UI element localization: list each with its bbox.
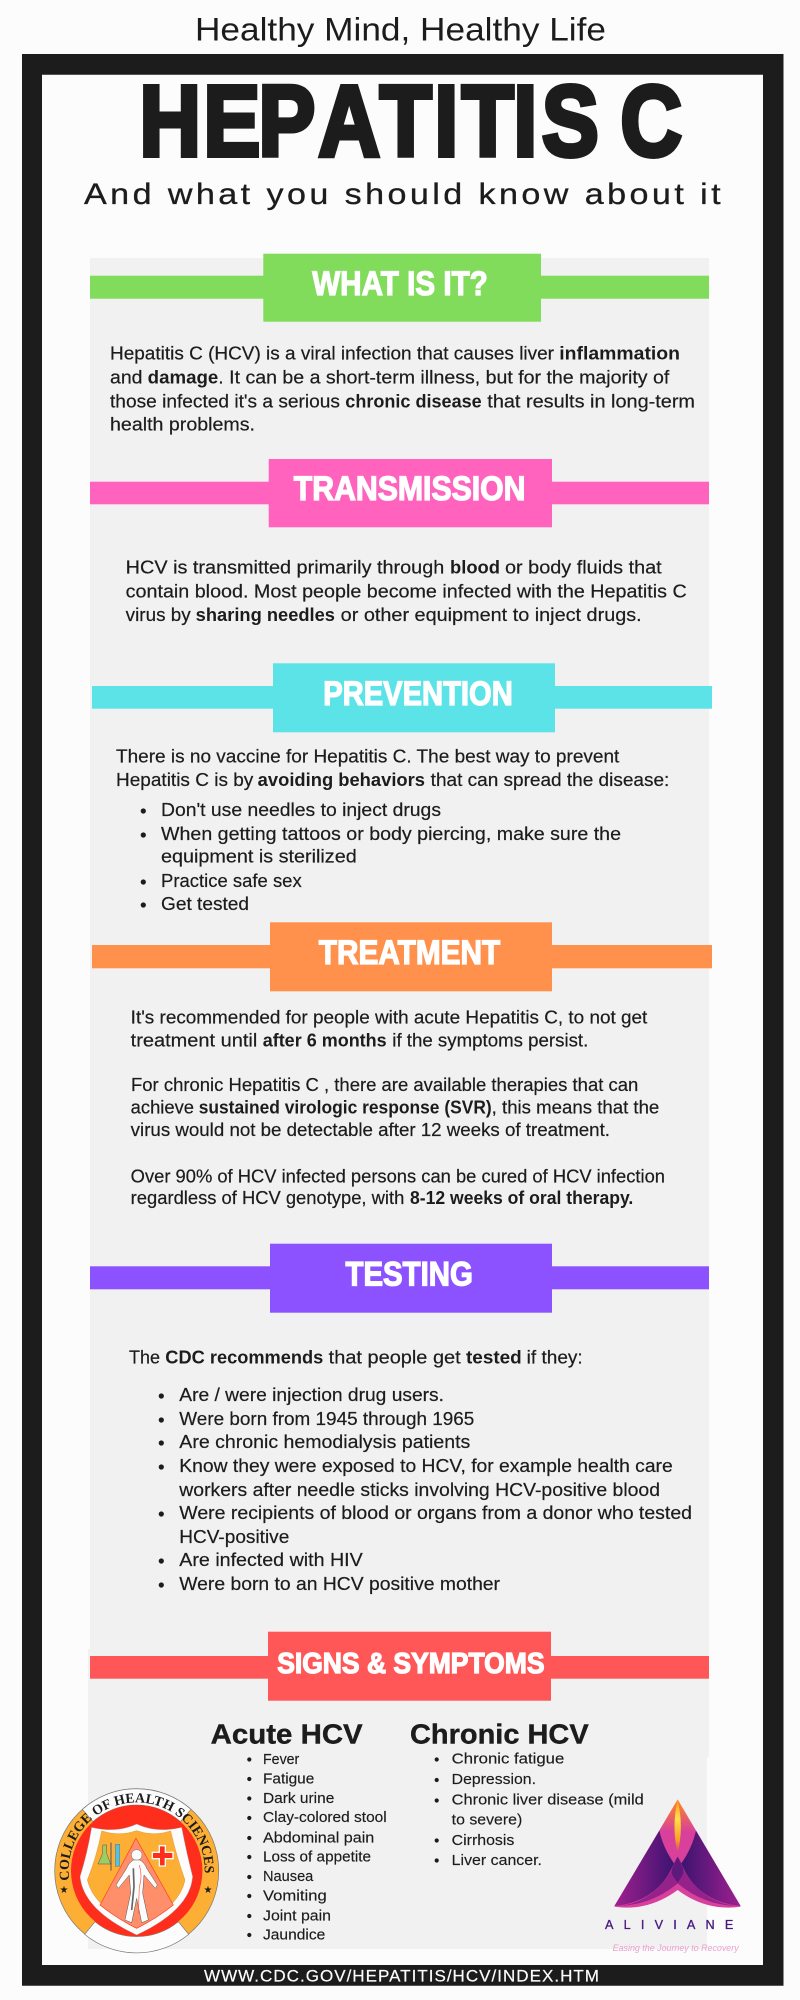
bullet list: testing: Were born from 1945 through 1965 bbox=[179, 1409, 474, 1429]
text block: prevention intro: There is no vaccine for Hepatitis C. The best way to prevent bbox=[116, 746, 619, 766]
bullet list: acute HCV symptoms: Loss of appetite bbox=[263, 1849, 371, 1865]
text block: testing intro: The bbox=[129, 1347, 160, 1367]
banner: signs and symptoms bbox=[90, 1632, 709, 1701]
text block: transmission: virus by bbox=[126, 605, 191, 625]
human figure bbox=[131, 1850, 142, 1860]
icon: College of Health Sciences seal: ★ bbox=[60, 1885, 69, 1896]
bullet list: acute HCV symptoms: Nausea bbox=[263, 1869, 314, 1885]
text block: what is it: and bbox=[110, 367, 142, 387]
banner: prevention bbox=[92, 663, 712, 732]
banner: testing bbox=[90, 1244, 709, 1313]
subtitle: And what you should know about it bbox=[84, 178, 724, 211]
icon: College of Health Sciences seal: COLLEGE OF HEALTH SCIENCES bbox=[60, 1793, 214, 1880]
footer URL: WWW.CDC.GOV/HEPATITIS/HCV/INDEX.HTM bbox=[204, 1967, 600, 1986]
text block: what is it: inflammation bbox=[559, 343, 680, 363]
bullet list: testing: workers after needle sticks involving HCV-positive blood bbox=[178, 1480, 660, 1500]
text block: treatment: achieve bbox=[131, 1097, 194, 1117]
text block: transmission bbox=[126, 557, 687, 625]
bullet list: prevention: When getting tattoos or body piercing, make sure the bbox=[161, 824, 621, 844]
panel: transmission bbox=[90, 459, 709, 625]
bullet list: testing: Were born to an HCV positive mother bbox=[179, 1574, 500, 1594]
banner: transmission bbox=[90, 459, 709, 527]
banner: signs and symptoms: SIGNS & SYMPTOMS bbox=[277, 1648, 544, 1680]
text block: testing intro: that people get bbox=[329, 1347, 461, 1367]
logo tagline: Easing the Journey to Recovery bbox=[613, 1943, 740, 1953]
bullet list: acute HCV symptoms: Fever bbox=[263, 1752, 299, 1768]
panel: light grey content background bbox=[88, 258, 709, 1949]
bullet list: acute HCV symptoms: Dark urine bbox=[263, 1791, 334, 1807]
text block: treatment: regardless of HCV genotype, with bbox=[131, 1188, 404, 1208]
text block: transmission: contain blood. Most people become infected with the Hepatitis C bbox=[126, 581, 687, 601]
bullet list: chronic HCV symptoms: Liver cancer. bbox=[452, 1853, 542, 1869]
red cross bbox=[152, 1846, 173, 1866]
text block: transmission: HCV is transmitted primarily through bbox=[126, 557, 444, 577]
text block: testing intro: CDC recommends bbox=[165, 1347, 323, 1367]
banner: what is it: WHAT IS IT? bbox=[312, 265, 488, 303]
text block: testing intro bbox=[129, 1347, 583, 1367]
bullet list: prevention bbox=[141, 800, 621, 914]
icon: College of Health Sciences seal: ★ bbox=[204, 1885, 213, 1896]
bullet list: testing: Are / were injection drug users. bbox=[179, 1385, 444, 1405]
text block: what is it: those infected it's a serious bbox=[110, 391, 340, 411]
panel: signs and symptoms bbox=[90, 1632, 709, 1943]
bullet list: prevention: Don't use needles to inject drugs bbox=[161, 800, 441, 820]
panel: prevention bbox=[92, 663, 712, 914]
banner: testing: TESTING bbox=[346, 1256, 473, 1294]
text block: treatment: , this means that the bbox=[492, 1097, 659, 1117]
heading: acute HCV: Acute HCV bbox=[211, 1718, 363, 1749]
icon: Aliviane logo bbox=[605, 1799, 747, 1953]
bullet list: acute HCV symptoms: Clay-colored stool bbox=[263, 1810, 387, 1826]
text block: treatment: after 6 months bbox=[263, 1030, 387, 1050]
bullet list: acute HCV symptoms: Joint pain bbox=[263, 1908, 331, 1924]
banner: prevention: PREVENTION bbox=[323, 675, 513, 713]
text block: what is it: Hepatitis C (HCV) is a viral infection that causes liver bbox=[110, 343, 554, 363]
text block: what is it bbox=[110, 343, 695, 434]
text block: prevention intro: avoiding behaviors bbox=[258, 770, 425, 790]
text block: prevention intro bbox=[116, 746, 669, 790]
text block: transmission: or other equipment to inject drugs. bbox=[341, 605, 642, 625]
panel: what is it bbox=[90, 254, 709, 434]
bullet list: chronic HCV symptoms: Depression. bbox=[452, 1772, 536, 1788]
text block: transmission: or body fluids that bbox=[505, 557, 662, 577]
icon: College of Health Sciences seal bbox=[54, 1788, 220, 1954]
bullet list: chronic HCV symptoms bbox=[435, 1752, 644, 1869]
text block: treatment: virus would not be detectable after 12 weeks of treatment. bbox=[131, 1120, 610, 1140]
banner: what is it bbox=[90, 254, 709, 322]
text block: treatment: For chronic Hepatitis C , there are available therapies that can bbox=[131, 1075, 638, 1095]
bullet list: acute HCV symptoms bbox=[247, 1752, 387, 1943]
bullet list: testing: Are chronic hemodialysis patients bbox=[179, 1432, 470, 1452]
banner: treatment bbox=[92, 922, 712, 991]
top tagline: Healthy Mind, Healthy Life bbox=[195, 12, 606, 48]
bullet list: chronic HCV symptoms: Cirrhosis bbox=[452, 1833, 514, 1849]
text block: treatment bbox=[131, 1007, 665, 1208]
bullet list: acute HCV symptoms: Vomiting bbox=[263, 1888, 327, 1904]
text block: prevention intro: Hepatitis C is by bbox=[116, 770, 253, 790]
text block: transmission: sharing needles bbox=[196, 605, 335, 625]
text block: treatment: sustained virologic response (SVR) bbox=[199, 1097, 492, 1117]
bullet list: prevention: Practice safe sex bbox=[161, 871, 302, 891]
bullet list: acute HCV symptoms: Abdominal pain bbox=[263, 1830, 374, 1846]
bullet list: acute HCV symptoms: Jaundice bbox=[263, 1927, 325, 1943]
text block: what is it: damage bbox=[148, 367, 218, 387]
bullet list: prevention: Get tested bbox=[161, 894, 249, 914]
bullet list: testing: HCV-positive bbox=[179, 1527, 289, 1547]
shield bbox=[80, 1824, 193, 1935]
text block: testing intro: if they: bbox=[527, 1347, 583, 1367]
heading: chronic HCV: Chronic HCV bbox=[410, 1718, 589, 1749]
text block: what is it: that results in long-term bbox=[487, 391, 695, 411]
bullet list: chronic HCV symptoms: Chronic fatigue bbox=[452, 1752, 564, 1768]
banner: treatment: TREATMENT bbox=[319, 934, 500, 972]
text block: prevention intro: that can spread the disease: bbox=[431, 770, 669, 790]
bullet list: acute HCV symptoms: Fatigue bbox=[263, 1771, 314, 1787]
text block: treatment: 8-12 weeks of oral therapy. bbox=[410, 1188, 633, 1208]
text block: what is it: chronic disease bbox=[345, 391, 482, 411]
banner: transmission: TRANSMISSION bbox=[294, 470, 526, 508]
flask, pipette, test tube bbox=[98, 1845, 111, 1864]
bullet list: prevention: equipment is sterilized bbox=[161, 847, 357, 867]
bullet list: chronic HCV symptoms: Chronic liver disease (mild bbox=[452, 1793, 644, 1809]
main title: HEPATITIS C bbox=[139, 65, 682, 177]
panel: testing bbox=[90, 1244, 709, 1594]
text block: treatment: Over 90% of HCV infected persons can be cured of HCV infection bbox=[131, 1166, 665, 1186]
bullet list: testing bbox=[159, 1385, 692, 1594]
panel: treatment bbox=[92, 922, 712, 1208]
bullet list: chronic HCV symptoms: to severe) bbox=[452, 1813, 522, 1829]
text block: what is it: health problems. bbox=[110, 414, 255, 434]
bullet list: testing: Were recipients of blood or organs from a donor who tested bbox=[179, 1503, 692, 1523]
bullet list: testing: Know they were exposed to HCV, for example health care bbox=[179, 1456, 673, 1476]
text block: what is it: . It can be a short-term illness, but for the majority of bbox=[218, 367, 670, 387]
text block: treatment: It's recommended for people with acute Hepatitis C, to not get bbox=[131, 1007, 647, 1027]
bullet list: testing: Are infected with HIV bbox=[179, 1550, 363, 1570]
text block: treatment: treatment until bbox=[131, 1030, 257, 1050]
text block: transmission: blood bbox=[450, 557, 500, 577]
text block: treatment: if the symptoms persist. bbox=[392, 1030, 588, 1050]
text block: testing intro: tested bbox=[466, 1347, 522, 1367]
logo name: ALIVIANE bbox=[605, 1918, 747, 1932]
